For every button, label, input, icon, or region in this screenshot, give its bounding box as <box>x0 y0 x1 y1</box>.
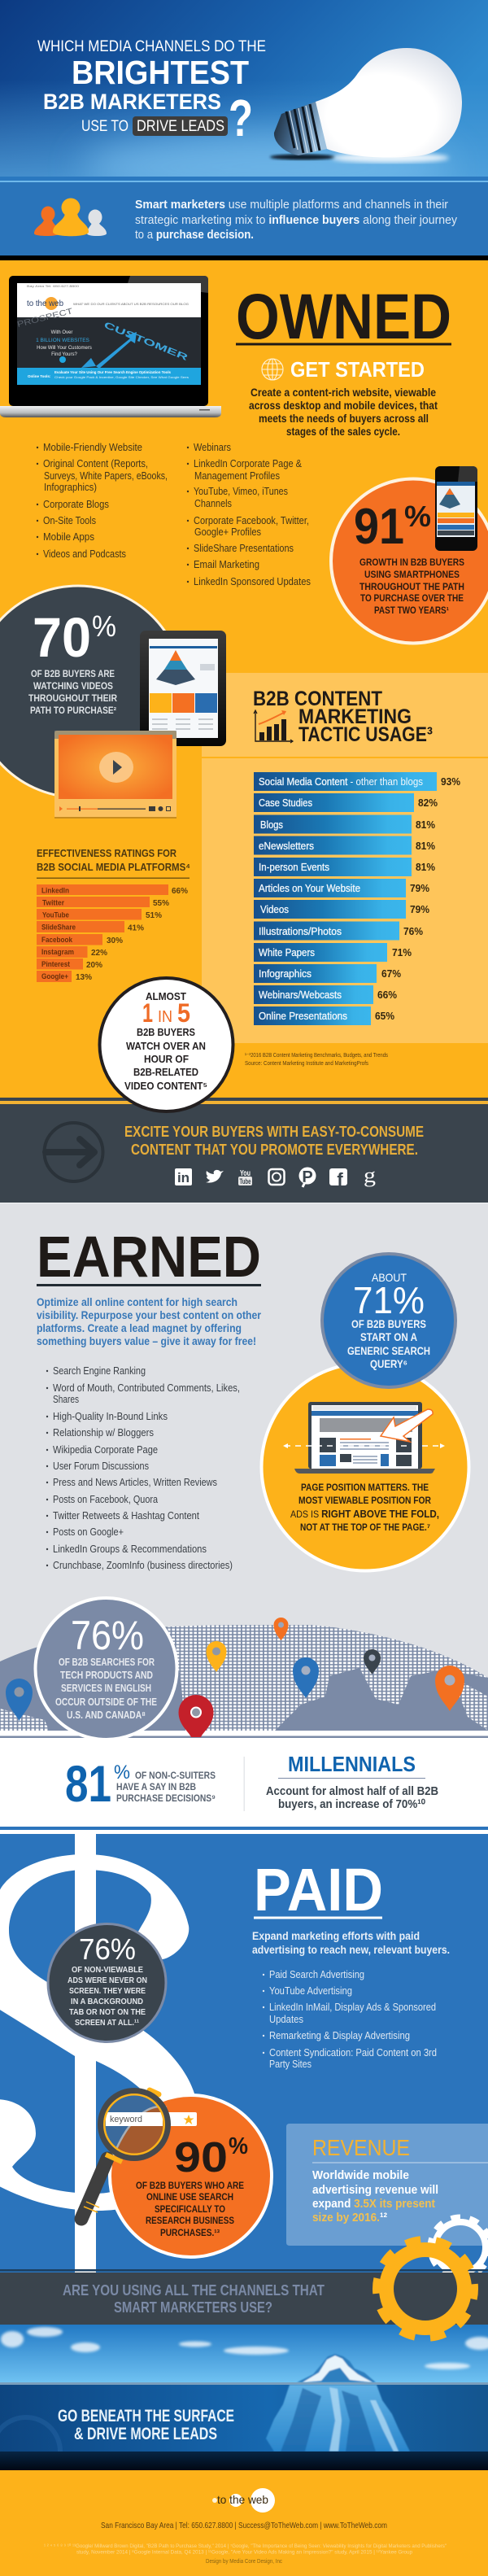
bar chart: tactic usage: 66% <box>377 989 397 1001</box>
title: DRIVE LEADS <box>137 118 224 135</box>
icons: social media: g <box>364 1164 376 1187</box>
list: owned channels right: LinkedIn Sponsored Updates <box>194 575 311 587</box>
icon: arrow in circle <box>44 1123 102 1181</box>
icons: social media <box>175 1164 376 1190</box>
text: source note: Source: Content Marketing Institute and MarketingProfs <box>245 1061 368 1067</box>
bar chart: social media platforms: 20% <box>86 960 103 970</box>
callout: 76 percent non-viewable: TAB OR NOT ON THE <box>69 2007 146 2017</box>
heading: social effectiveness <box>37 847 190 879</box>
list: earned channels: Shares <box>53 1394 79 1405</box>
list: owned channels left: Original Content (Reports, <box>43 457 148 469</box>
callout: 91 percent: 91 <box>354 499 404 555</box>
callout: 71 percent: OF B2B BUYERS <box>351 1317 426 1330</box>
icon: light bulb <box>270 48 462 163</box>
icon: dollar sign <box>0 1834 199 2273</box>
text: paid intro: advertising to reach new, relevant buyers. <box>252 1943 450 1956</box>
list: owned channels right: Management Profiles <box>194 469 280 482</box>
callout: 90 percent: 90 <box>174 2134 228 2181</box>
stat: 81 percent: % <box>114 1762 130 1784</box>
stat: millennials: Account for almost half of all B2B <box>266 1784 438 1798</box>
list: paid channels: Paid Search Advertising <box>269 1969 364 1980</box>
callout: 1 in 5 <box>99 978 233 1111</box>
laptop: website screenshot: How Will Your Customers <box>37 346 92 351</box>
list: paid channels: Updates <box>269 2014 303 2025</box>
list: earned channels: LinkedIn Groups & Recommendations <box>53 1543 207 1555</box>
stat: 81 percent: OF NON-C-SUITERS <box>135 1770 216 1781</box>
callout: page position: PAGE POSITION MATTERS. THE <box>301 1482 429 1493</box>
text: excite: CONTENT THAT YOU PROMOTE EVERYWHERE. <box>131 1142 418 1158</box>
icons: social media: f <box>337 1169 343 1190</box>
text: earned intro: Optimize all online content for high search <box>37 1295 237 1308</box>
text: earned intro <box>37 1295 261 1347</box>
callout: 76 percent non-viewable: OF NON-VIEWABLE <box>72 1965 143 1975</box>
callout: 70 percent: THROUGHOUT THEIR <box>28 694 118 704</box>
callout: 70 percent: PATH TO PURCHASE² <box>30 706 116 716</box>
bar chart: social media platforms: Instagram <box>41 948 74 957</box>
stat: 81 percent: HAVE A SAY IN B2B <box>116 1781 196 1792</box>
bar chart: social media platforms: YouTube <box>42 911 69 919</box>
callout: 76 percent non-viewable <box>48 1923 166 2042</box>
list: paid channels: Party Sites <box>269 2059 312 2070</box>
heading: tactic usage: TACTIC USAGE³ <box>298 723 433 746</box>
callout: 90 percent <box>110 2095 272 2257</box>
list: earned channels: Wikipedia Corporate Page <box>53 1444 158 1456</box>
panel: footer <box>0 2470 488 2576</box>
heading: tactic usage <box>253 688 433 746</box>
panel: revenue: REVENUE <box>312 2135 410 2160</box>
callout: page position: NOT AT THE TOP OF THE PAGE.⁷ <box>300 1522 430 1533</box>
bar chart: tactic usage <box>254 772 460 1025</box>
title: WHICH MEDIA CHANNELS DO THE <box>37 38 266 55</box>
callout: 76 percent searches: TECH PRODUCTS AND <box>60 1670 153 1681</box>
callout: 1 in 5: WATCH OVER AN <box>126 1040 206 1052</box>
callout: 90 percent: SPECIFICALLY TO <box>155 2205 225 2215</box>
callout: 70 percent <box>0 586 184 797</box>
text: footnotes: ¹ ² ⁴ ⁵ ⁶ ⁸ ⁹ ¹⁰ ¹³Google/ Millward Brown Digital, "B2B Path to Purchase Study," 2014 | ⁷Google, "The Importance of Being Seen: Viewability Insights for Digital Marketers and Publishers" <box>44 2543 447 2549</box>
list: earned channels: Posts on Facebook, Quora <box>53 1494 158 1505</box>
laptop: website screenshot: Bay Area Tel. 650.627.8800 <box>27 285 79 288</box>
iceberg above water <box>297 2354 376 2382</box>
list: owned channels right: Google+ Profiles <box>194 526 261 538</box>
text: paid intro <box>252 1929 450 1956</box>
callout: 91 percent: USING SMARTPHONES <box>364 570 460 580</box>
list: paid channels <box>263 1969 437 2070</box>
panel: revenue: Worldwide mobile <box>312 2168 409 2182</box>
text: earned intro: something buyers value – give it away for free! <box>37 1334 256 1347</box>
icon: video player <box>54 731 176 819</box>
callout: 90 percent: RESEARCH BUSINESS <box>146 2216 234 2226</box>
bar chart: social media platforms: Google+ <box>41 972 68 981</box>
heading: tactic usage: B2B CONTENT <box>253 688 382 710</box>
callout: 90 percent: OF B2B BUYERS WHO ARE <box>136 2181 244 2191</box>
list: owned channels left: Mobile-Friendly Website <box>43 441 142 453</box>
list: earned channels: Posts on Google+ <box>53 1526 124 1538</box>
bar chart: social media platforms: 13% <box>76 972 93 982</box>
panel: closing question: ARE YOU USING ALL THE CHANNELS THAT <box>63 2282 325 2299</box>
list: owned channels left: Infographics) <box>44 481 97 493</box>
list: owned channels left: Surveys, White Papers, eBooks, <box>44 469 168 482</box>
bar chart: tactic usage: In-person Events <box>259 862 329 873</box>
callout: 76 percent searches: SERVICES IN ENGLISH <box>61 1683 151 1694</box>
heading: tactic usage: MARKETING <box>298 705 412 728</box>
bar chart: social media platforms: 66% <box>172 886 189 896</box>
title: USE TO <box>81 118 129 135</box>
list: owned channels left: Videos and Podcasts <box>43 548 126 560</box>
heading: paid: PAID <box>254 1856 383 1923</box>
bar chart: tactic usage: Online Presentations <box>259 1011 347 1022</box>
heading: social effectiveness: B2B SOCIAL MEDIA PLATFORMS⁴ <box>37 861 190 873</box>
stat: millennials: buyers, an increase of 70%¹⁰ <box>278 1797 425 1811</box>
laptop: website screenshot: CUSTOMER <box>102 321 189 363</box>
bar chart: tactic usage: 79% <box>410 882 429 894</box>
text: earned intro: visibility. Repurpose your best content on other <box>37 1308 261 1321</box>
callout: 76 percent non-viewable: ADS WERE NEVER ON <box>68 1976 147 1985</box>
callout: 90 percent: ONLINE USE SEARCH <box>146 2193 233 2203</box>
list: owned channels right: Email Marketing <box>194 558 259 570</box>
icons: social media: in <box>177 1170 190 1185</box>
callout: 76 percent non-viewable: 76% <box>79 1932 136 1966</box>
bar chart: tactic usage: Illustrations/Photos <box>259 926 342 937</box>
panel: excite banner <box>0 1098 488 1203</box>
panel: closing question: SMART MARKETERS USE? <box>114 2299 272 2316</box>
laptop: website screenshot: WHAT WE DO OUR CLIENTS ABOUT US B2B RESOURCES OUR BLOG <box>73 302 189 306</box>
callout: 76 percent searches: 76% <box>71 1613 144 1658</box>
text: get started: stages of the sales cycle. <box>286 425 400 438</box>
laptop: website screenshot: Online Tools: <box>28 374 51 378</box>
list: earned channels: Relationship w/ Bloggers <box>53 1427 154 1439</box>
list: owned channels right: LinkedIn Corporate Page & <box>194 457 302 469</box>
logo: to the web <box>212 2488 275 2513</box>
bar chart: social media platforms: 51% <box>146 910 163 920</box>
bar chart: tactic usage: 81% <box>416 819 435 831</box>
icon: laptop with fold line <box>283 1402 445 1474</box>
callout: page position: MOST VIEWABLE POSITION FOR <box>298 1495 431 1506</box>
bar chart: tactic usage: 67% <box>381 967 401 980</box>
callout: 91 percent: PAST TWO YEARS¹ <box>374 606 449 616</box>
callout: 76 percent non-viewable: SCREEN AT ALL.¹¹ <box>75 2018 139 2028</box>
panel: revenue: advertising revenue will <box>312 2183 438 2197</box>
callout: 91 percent: TO PURCHASE OVER THE <box>360 594 464 604</box>
list: earned channels: Press and News Articles, Written Reviews <box>53 1477 217 1488</box>
laptop: website screenshot: PROSPECT <box>16 307 74 330</box>
text: source note <box>245 1053 388 1067</box>
list: earned channels: Crunchbase, ZoomInfo (business directories) <box>53 1560 233 1571</box>
list: paid channels: Remarketing & Display Advertising <box>269 2030 410 2041</box>
callout: 70 percent: 70 <box>33 606 91 669</box>
icons: social media: P <box>302 1168 313 1186</box>
list: owned channels right <box>187 441 311 587</box>
laptop: website screenshot: to the web <box>27 299 63 308</box>
list: owned channels left <box>37 441 168 560</box>
callout: 70 percent: % <box>92 609 116 643</box>
text: excite <box>124 1124 424 1158</box>
bar chart: social media platforms: 55% <box>153 898 170 908</box>
bar chart: tactic usage: Articles on Your Website <box>259 883 360 894</box>
callout: 91 percent <box>331 466 488 643</box>
callout: 76 percent searches: OCCUR OUTSIDE OF THE <box>55 1696 157 1708</box>
list: owned channels right: Webinars <box>194 441 231 453</box>
text: earned intro: platforms. Create a lead magnet by offering <box>37 1321 242 1334</box>
bar chart: tactic usage: White Papers <box>259 947 315 958</box>
text: design credit: Design by Media Core Design, Inc <box>206 2559 282 2565</box>
heading: earned: EARNED <box>37 1225 261 1290</box>
callout: 90 percent: % <box>229 2133 248 2159</box>
callout: 1 in 5: B2B BUYERS <box>137 1026 195 1038</box>
map: world dotted <box>0 1596 488 1738</box>
bar chart: tactic usage: Videos <box>260 904 289 915</box>
bar chart: tactic usage: 81% <box>416 840 435 852</box>
bar chart: social media platforms: Facebook <box>41 936 73 945</box>
panel: hero <box>0 0 488 201</box>
bar chart: tactic usage: 82% <box>418 797 438 809</box>
bar chart: social media platforms: LinkedIn <box>41 887 69 895</box>
callout: 91 percent: THROUGHOUT THE PATH <box>359 583 464 592</box>
heading: social effectiveness: EFFECTIVENESS RATINGS FOR <box>37 847 177 859</box>
text: contact: San Francisco Bay Area | Tel: 650.627.8800 | Success@ToTheWeb.com | www.ToTheWeb.com <box>101 2521 387 2530</box>
callout: 1 in 5: HOUR OF <box>144 1053 189 1065</box>
laptop: website screenshot <box>0 276 221 417</box>
callout: 91 percent: GROWTH IN B2B BUYERS <box>359 558 464 568</box>
callout: 1 in 5: B2B-RELATED <box>133 1066 198 1078</box>
text: get started: across desktop and mobile devices, that <box>249 399 438 412</box>
stat: 81 percent <box>65 1756 216 1813</box>
bar chart: tactic usage: 79% <box>410 903 429 915</box>
panel: owned <box>0 260 488 1098</box>
list: earned channels: User Forum Discussions <box>53 1460 149 1472</box>
laptop: website screenshot: Evaluate Your Site Using Our Free Search Engine Optimization Tools <box>54 370 171 374</box>
bar chart: social media platforms: 41% <box>128 923 145 932</box>
bar chart: tactic usage: Blogs <box>260 819 283 831</box>
list: owned channels left: On-Site Tools <box>43 514 96 526</box>
bar chart: tactic usage: Webinars/Webcasts <box>259 989 342 1001</box>
heading: owned: OWNED <box>236 280 451 352</box>
callout: 76 percent searches: OF B2B SEARCHES FOR <box>59 1657 155 1668</box>
callout: 1 in 5: VIDEO CONTENT⁵ <box>124 1080 207 1092</box>
panel: content marketing usage <box>202 673 488 1043</box>
callout: page position: ADS IS RIGHT ABOVE THE FOLD, <box>290 1508 439 1520</box>
panel: revenue <box>286 2124 488 2246</box>
icons: map pins <box>6 1618 464 1737</box>
panel: intro <box>0 182 488 255</box>
bar chart: social media platforms: SlideShare <box>41 923 76 932</box>
panel: closing question <box>0 2269 488 2325</box>
callout: 1 in 5: 5 <box>177 998 190 1028</box>
icons: social media: You <box>240 1169 251 1178</box>
list: earned channels <box>46 1365 240 1571</box>
bar chart: tactic usage: 93% <box>441 775 460 788</box>
icon: magnifying glass with keyword <box>81 2090 197 2219</box>
stat: 81 percent: PURCHASE DECISIONS⁹ <box>116 1792 216 1804</box>
icon: bar chart <box>254 710 293 743</box>
text: intro: to a purchase decision. <box>135 228 254 242</box>
callout: 76 percent searches <box>36 1598 177 1740</box>
icon: globe <box>262 359 283 380</box>
callout: 71 percent <box>322 1254 455 1387</box>
title: ? <box>229 89 253 147</box>
callout: 1 in 5: 1 <box>142 998 153 1028</box>
stat: millennials: MILLENNIALS <box>288 1752 416 1776</box>
text: intro <box>135 198 457 242</box>
panel: revenue: expand 3.5X its present <box>312 2197 435 2211</box>
panel: paid <box>0 1827 488 2277</box>
list: owned channels right: SlideShare Presentations <box>194 542 294 554</box>
stat: 81 percent: 81 <box>65 1756 111 1813</box>
heading: get started: GET STARTED <box>290 357 425 382</box>
list: owned channels right: Channels <box>194 497 232 509</box>
list: paid channels: LinkedIn InMail, Display Ads & Sponsored <box>269 2002 436 2013</box>
bar chart: tactic usage: Social Media Content - other than blogs <box>259 776 423 788</box>
bar chart: tactic usage: Case Studies <box>259 797 312 809</box>
bar chart: social media platforms: Twitter <box>42 898 64 908</box>
list: earned channels: Word of Mouth, Contributed Comments, Likes, <box>53 1382 240 1394</box>
bar chart: tactic usage: 81% <box>416 861 435 873</box>
bar chart: tactic usage: Infographics <box>259 968 312 980</box>
callout: 1 in 5: ALMOST <box>146 990 186 1002</box>
list: owned channels right: YouTube, Vimeo, iTunes <box>194 485 288 497</box>
list: paid channels: YouTube Advertising <box>269 1985 352 1997</box>
bar chart: tactic usage: 65% <box>375 1010 394 1022</box>
title <box>37 38 266 147</box>
icon: people <box>34 199 107 236</box>
text: paid intro: Expand marketing efforts with paid <box>252 1929 420 1942</box>
callout: 76 percent non-viewable: IN A BACKGROUND <box>71 1997 143 2006</box>
list: owned channels right: Corporate Facebook, Twitter, <box>194 514 309 526</box>
panel: iceberg <box>0 2325 488 2486</box>
icon: white gear <box>430 2217 488 2277</box>
text: get started <box>249 386 438 438</box>
title: BRIGHTEST <box>72 54 249 91</box>
bar chart: social media platforms: 22% <box>91 948 108 958</box>
callout: page position <box>262 1364 468 1570</box>
callout: 71 percent: ABOUT <box>372 1271 407 1284</box>
callout: 70 percent: WATCHING VIDEOS <box>33 682 113 692</box>
icon: tablet <box>140 631 226 746</box>
iceberg under water <box>266 2385 410 2452</box>
callout: 71 percent: START ON A <box>360 1330 417 1343</box>
laptop: website screenshot: 1 BILLION WEBSITES <box>36 338 90 343</box>
text: go beneath <box>58 2407 234 2443</box>
bar chart: social media platforms: Pinterest <box>41 960 71 969</box>
list: owned channels left: Mobile Apps <box>43 530 94 543</box>
callout: 76 percent non-viewable: SCREEN. THEY WERE <box>69 1986 146 1996</box>
icon: yellow gear <box>377 2240 474 2338</box>
list: paid channels: Content Syndication: Paid Content on 3rd <box>269 2047 437 2059</box>
text: intro: strategic marketing mix to influence buyers along their journey <box>135 213 457 227</box>
callout: 71 percent: 71% <box>353 1279 425 1321</box>
icon: magnifying glass with keyword: keyword <box>110 2115 142 2124</box>
bar chart: social media platforms: 30% <box>107 936 124 945</box>
callout: 71 percent: GENERIC SEARCH <box>347 1344 430 1357</box>
bar chart: social media platforms <box>37 884 189 982</box>
callout: 91 percent: % <box>404 500 431 533</box>
bar chart: tactic usage: 76% <box>403 925 423 937</box>
text: intro: Smart marketers use multiple platforms and channels in their <box>135 198 448 212</box>
callout: 90 percent: PURCHASES.¹³ <box>160 2229 220 2238</box>
text: excite: EXCITE YOUR BUYERS WITH EASY-TO-CONSUME <box>124 1124 424 1140</box>
panel: revenue: size by 2016.¹² <box>312 2211 387 2225</box>
list: earned channels: High-Quality In-Bound Links <box>53 1411 168 1422</box>
text: footnotes <box>44 2543 447 2555</box>
text: source note: ¹⁻³2016 B2B Content Marketing Benchmarks, Budgets, and Trends <box>245 1053 388 1059</box>
callout: 71 percent: QUERY⁶ <box>370 1357 407 1370</box>
callout: 76 percent searches: U.S. AND CANADA⁸ <box>67 1709 146 1721</box>
laptop: website screenshot: With Over <box>51 330 72 335</box>
list: owned channels left: Corporate Blogs <box>43 498 109 510</box>
callout: 1 in 5: IN <box>158 1008 172 1026</box>
text: go beneath: & DRIVE MORE LEADS <box>74 2425 217 2443</box>
list: earned channels: Search Engine Ranking <box>53 1365 146 1377</box>
callout: 70 percent: OF B2B BUYERS ARE <box>31 670 115 679</box>
text: footnotes: study, November 2014 | ⁸Google Internal Data, Q4 2013 | ¹¹Google, "Are Your Video Ads Making an Impression?" study, April 2015 | ¹²Yankee Group <box>76 2550 412 2555</box>
logo: to the web: to the web <box>217 2493 268 2506</box>
panel: earned <box>0 1203 488 1731</box>
bar chart: tactic usage: eNewsletters <box>259 840 314 852</box>
icon: phone <box>435 466 477 551</box>
text: get started: Create a content-rich website, viewable <box>251 386 436 399</box>
stat: millennials <box>266 1752 438 1811</box>
bar chart: tactic usage: 71% <box>392 946 412 958</box>
text: get started: meets the needs of buyers across all <box>259 412 429 425</box>
text: go beneath: GO BENEATH THE SURFACE <box>58 2407 234 2425</box>
title: B2B MARKETERS <box>43 90 221 114</box>
list: earned channels: Twitter Retweets & Hashtag Content <box>53 1510 199 1522</box>
laptop: website screenshot: Check your Google Pack & Incentive, Google Site Checker, See What Google Sees <box>54 376 189 379</box>
icons: social media: Tube <box>239 1177 251 1185</box>
laptop: website screenshot: Find Yours? <box>51 352 78 357</box>
